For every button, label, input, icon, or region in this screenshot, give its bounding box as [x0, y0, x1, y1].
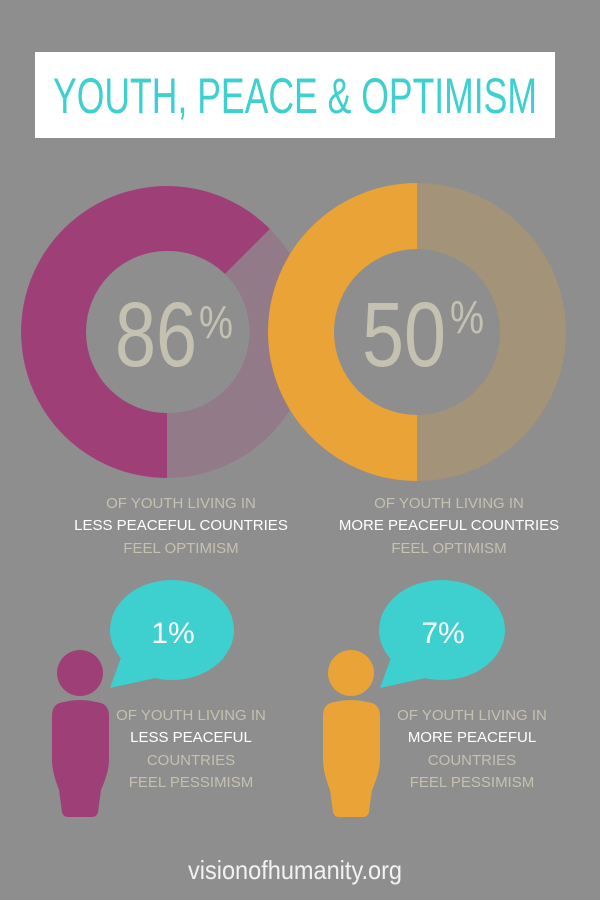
- text: more peaceful optimism: MORE PEACEFUL COUNTRIES: [339, 517, 559, 534]
- donut chart: 86%: 86: [115, 284, 197, 386]
- icon: orange person: [323, 650, 380, 817]
- text: more peaceful optimism: OF YOUTH LIVING IN: [374, 495, 524, 512]
- title: [35, 52, 555, 138]
- speech bubble: 1%: [110, 580, 234, 688]
- speech bubble: 7%: [379, 580, 505, 688]
- text: less peaceful pessimism: OF YOUTH LIVING IN: [116, 707, 266, 724]
- donut chart: 86%: %: [199, 296, 233, 348]
- text: less peaceful optimism: [74, 495, 288, 557]
- text: less peaceful pessimism: COUNTRIES: [147, 752, 235, 769]
- text: less peaceful pessimism: FEEL PESSIMISM: [129, 774, 253, 791]
- donut chart: 50%: %: [450, 291, 484, 343]
- text: less peaceful pessimism: LESS PEACEFUL: [130, 729, 252, 746]
- text: less peaceful optimism: LESS PEACEFUL COUNTRIES: [74, 517, 288, 534]
- text: more peaceful optimism: [339, 495, 559, 557]
- text: less peaceful optimism: FEEL OPTIMISM: [123, 540, 239, 557]
- speech bubble: 1%: 1%: [151, 617, 195, 650]
- text: less peaceful pessimism: [116, 707, 266, 791]
- text: less peaceful optimism: OF YOUTH LIVING IN: [106, 495, 256, 512]
- donut chart: 50%: 50: [362, 284, 446, 386]
- speech bubble: 7%: 7%: [421, 617, 465, 650]
- text: more peaceful pessimism: [397, 707, 547, 791]
- text: more peaceful pessimism: MORE PEACEFUL: [408, 729, 536, 746]
- icon: purple person: [52, 650, 109, 817]
- text: more peaceful optimism: FEEL OPTIMISM: [391, 540, 507, 557]
- text: more peaceful pessimism: COUNTRIES: [428, 752, 516, 769]
- footer url: visionofhumanity.org: [188, 855, 402, 885]
- text: more peaceful pessimism: FEEL PESSIMISM: [410, 774, 534, 791]
- text: more peaceful pessimism: OF YOUTH LIVING IN: [397, 707, 547, 724]
- donut chart: 86%: [21, 186, 313, 478]
- donut chart: 50%: [268, 183, 566, 481]
